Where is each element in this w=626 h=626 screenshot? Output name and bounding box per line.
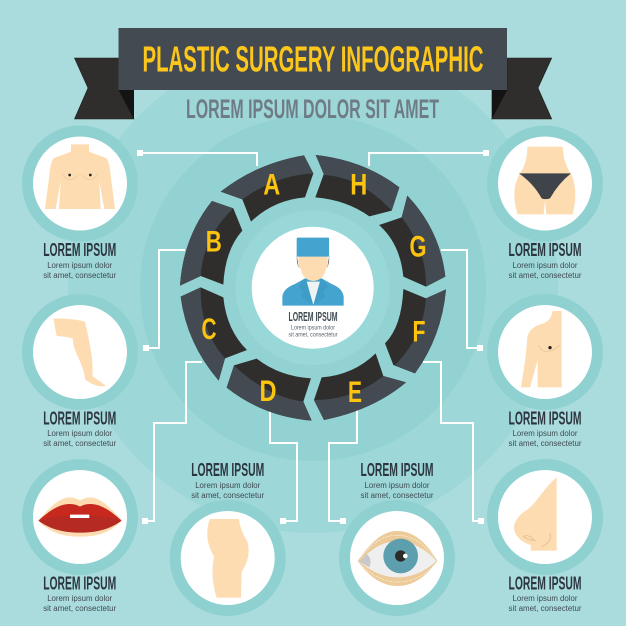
segment letters — [202, 168, 426, 409]
panel: chest — [28, 131, 132, 280]
panel: nose: Lorem ipsum dolor — [512, 594, 578, 603]
icon: surgeon — [282, 238, 344, 306]
segment D — [227, 359, 312, 421]
segment letters: F — [412, 316, 426, 349]
center panel: surgeon: Lorem ipsum dolor — [291, 324, 336, 332]
segment letters: H — [350, 168, 367, 201]
center panel: surgeon: LOREM IPSUM — [288, 310, 338, 324]
icon: lips — [38, 497, 122, 537]
panel: eye — [344, 460, 450, 610]
segment letters: A — [263, 168, 280, 201]
segment letters: D — [260, 375, 276, 408]
panel: breast side — [492, 300, 598, 448]
segment letters: C — [202, 313, 216, 346]
panel: chest: LOREM IPSUM — [43, 240, 116, 260]
panel: hip: sit amet, consectetur — [191, 491, 265, 500]
segment B — [180, 201, 242, 286]
ribbon banner — [74, 28, 552, 119]
panel: leg: LOREM IPSUM — [43, 408, 116, 428]
panel: hips: Lorem ipsum dolor — [512, 261, 578, 270]
panel: lips: LOREM IPSUM — [43, 574, 116, 594]
segment G — [379, 196, 445, 287]
panel: eye: LOREM IPSUM — [360, 460, 434, 480]
panel: hips — [492, 131, 598, 280]
icon: hips — [514, 147, 575, 214]
panel: lips: sit amet, consectetur — [43, 604, 117, 613]
connector lines — [137, 150, 489, 524]
segment E — [314, 353, 406, 420]
panel: leg — [28, 300, 132, 448]
panel: eye: sit amet, consectetur — [360, 491, 434, 500]
icon: chest — [45, 144, 115, 209]
panel: lips: Lorem ipsum dolor — [47, 594, 113, 603]
center panel: surgeon: sit amet, consectetur — [288, 332, 338, 338]
panel: nose: sit amet, consectetur — [508, 604, 582, 613]
panel: lips — [28, 464, 132, 613]
icon: leg — [53, 318, 106, 386]
panel: hip: Lorem ipsum dolor — [195, 481, 261, 490]
segment C — [181, 287, 247, 381]
panel: hips: sit amet, consectetur — [508, 271, 582, 280]
segment H — [315, 155, 399, 216]
panel: nose — [492, 464, 598, 613]
icon: eye — [358, 531, 437, 586]
icon: nose — [514, 477, 557, 551]
panel: breast side: Lorem ipsum dolor — [512, 429, 578, 438]
segment F — [385, 289, 446, 373]
segment letters: E — [348, 376, 362, 409]
segment letters: G — [410, 231, 426, 264]
panel: chest: Lorem ipsum dolor — [47, 261, 113, 270]
segmented ring — [180, 155, 446, 421]
panel: leg: Lorem ipsum dolor — [47, 429, 113, 438]
panel: hip: LOREM IPSUM — [191, 460, 264, 480]
center panel: surgeon — [252, 227, 374, 349]
panel: breast side: sit amet, consectetur — [508, 439, 582, 448]
icon: breast side — [521, 311, 562, 387]
panel: leg: sit amet, consectetur — [43, 439, 117, 448]
segment letters: B — [206, 226, 222, 259]
icon: hip — [207, 519, 249, 598]
subtitle: LOREM IPSUM DOLOR SIT AMET — [186, 94, 439, 124]
panel: hip — [175, 460, 280, 610]
panel: chest: sit amet, consectetur — [43, 271, 117, 280]
segment A — [221, 155, 313, 222]
panel: eye: Lorem ipsum dolor — [364, 481, 430, 490]
